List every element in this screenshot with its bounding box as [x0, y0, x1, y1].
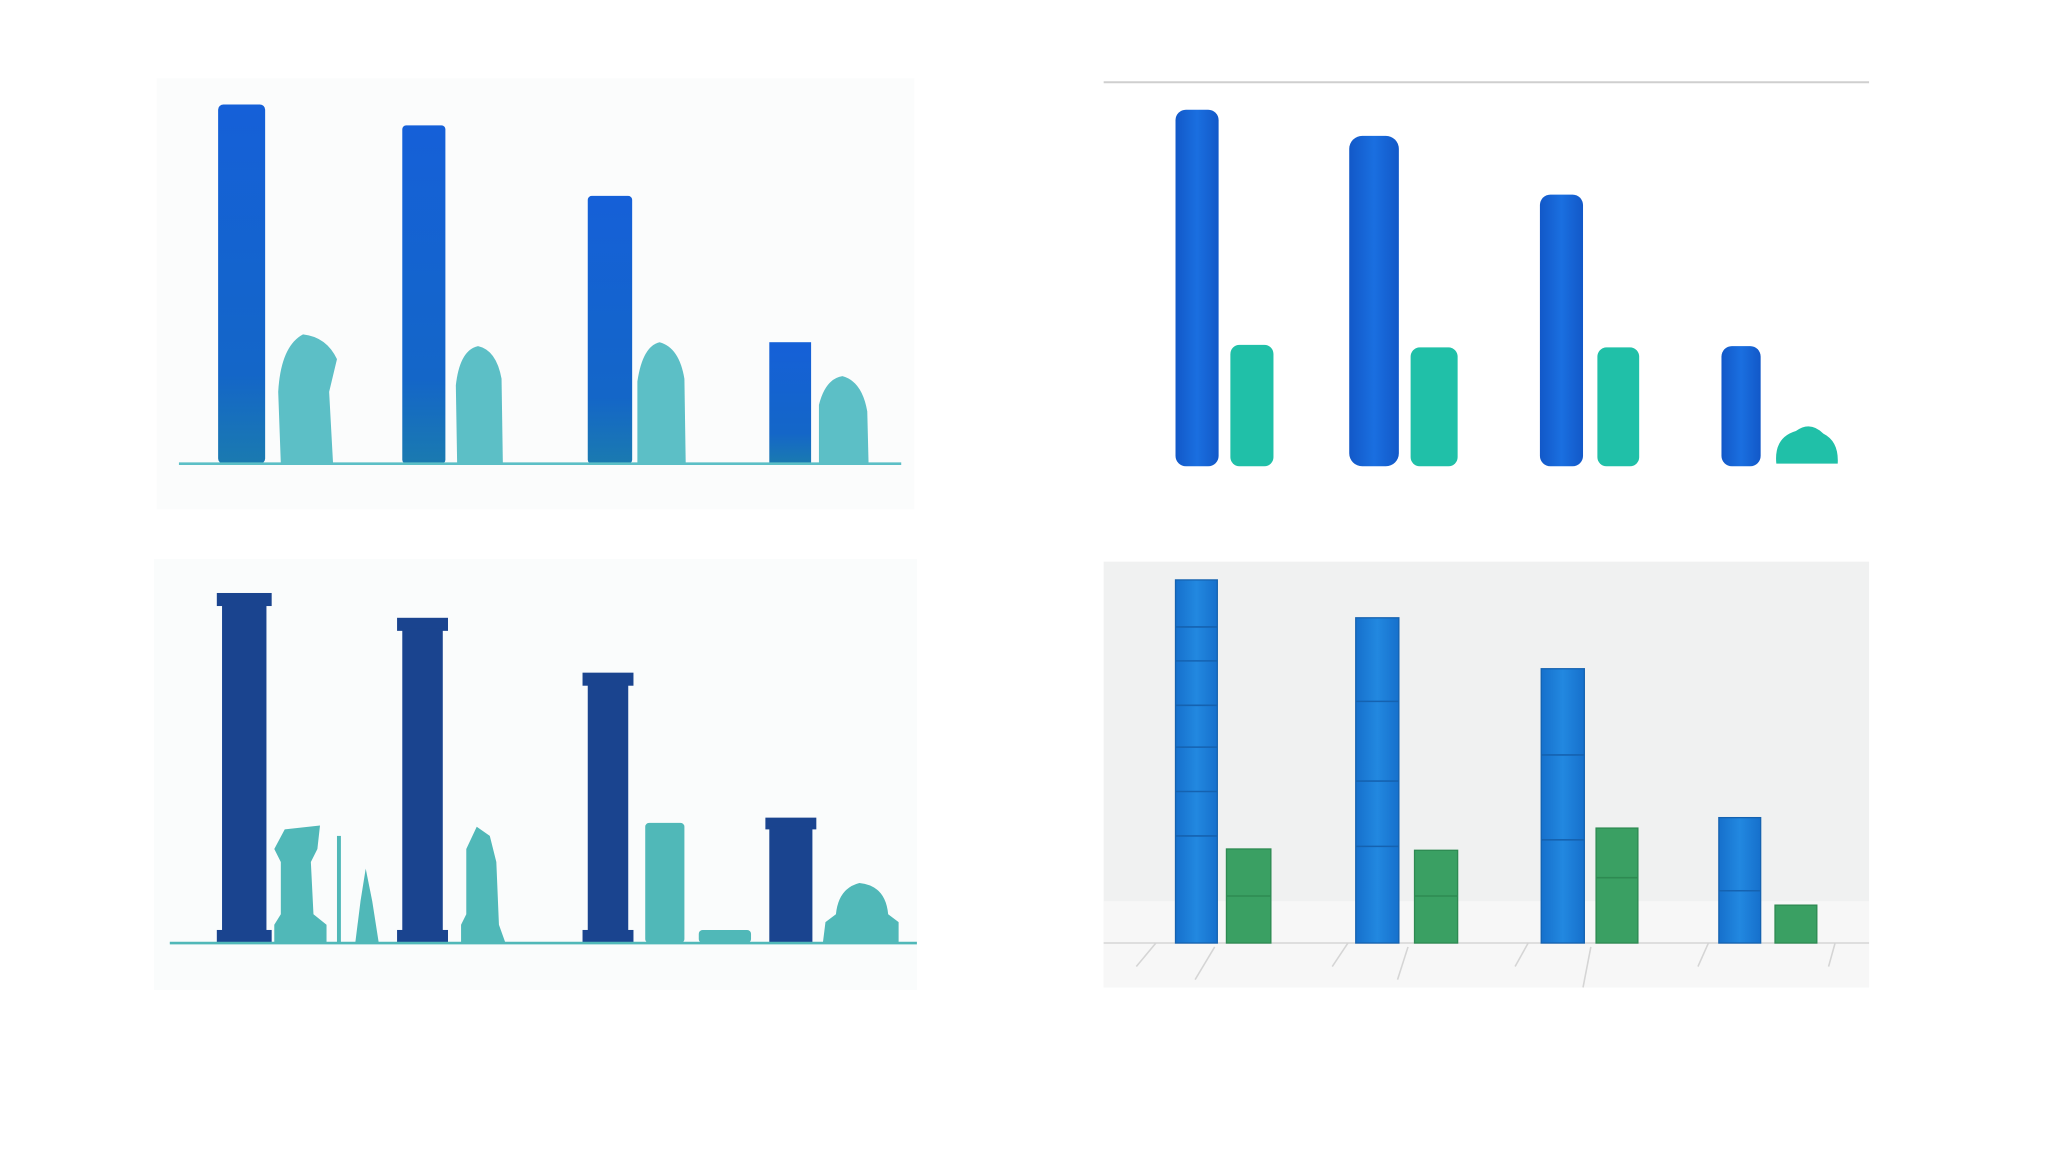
bar chart: blue clay bars: [1176, 110, 1761, 466]
bar chart: teal clay bars: [1230, 345, 1838, 466]
statues: teal figures: [278, 334, 869, 464]
bar chart: navy pillars: [217, 593, 816, 943]
bar chart: blue stacked blocks: [1176, 580, 1761, 943]
panel: top-left columns and statues: [157, 78, 914, 509]
panel: bottom-left pillars: [154, 559, 917, 990]
statues: teal ruins: [274, 823, 899, 943]
bar chart: blue columns: [218, 104, 811, 464]
panel: top-right clay bars: [1104, 82, 1869, 466]
bar chart: green stacked blocks: [1226, 828, 1817, 943]
panel: bottom-right block stacks: [1104, 562, 1869, 987]
